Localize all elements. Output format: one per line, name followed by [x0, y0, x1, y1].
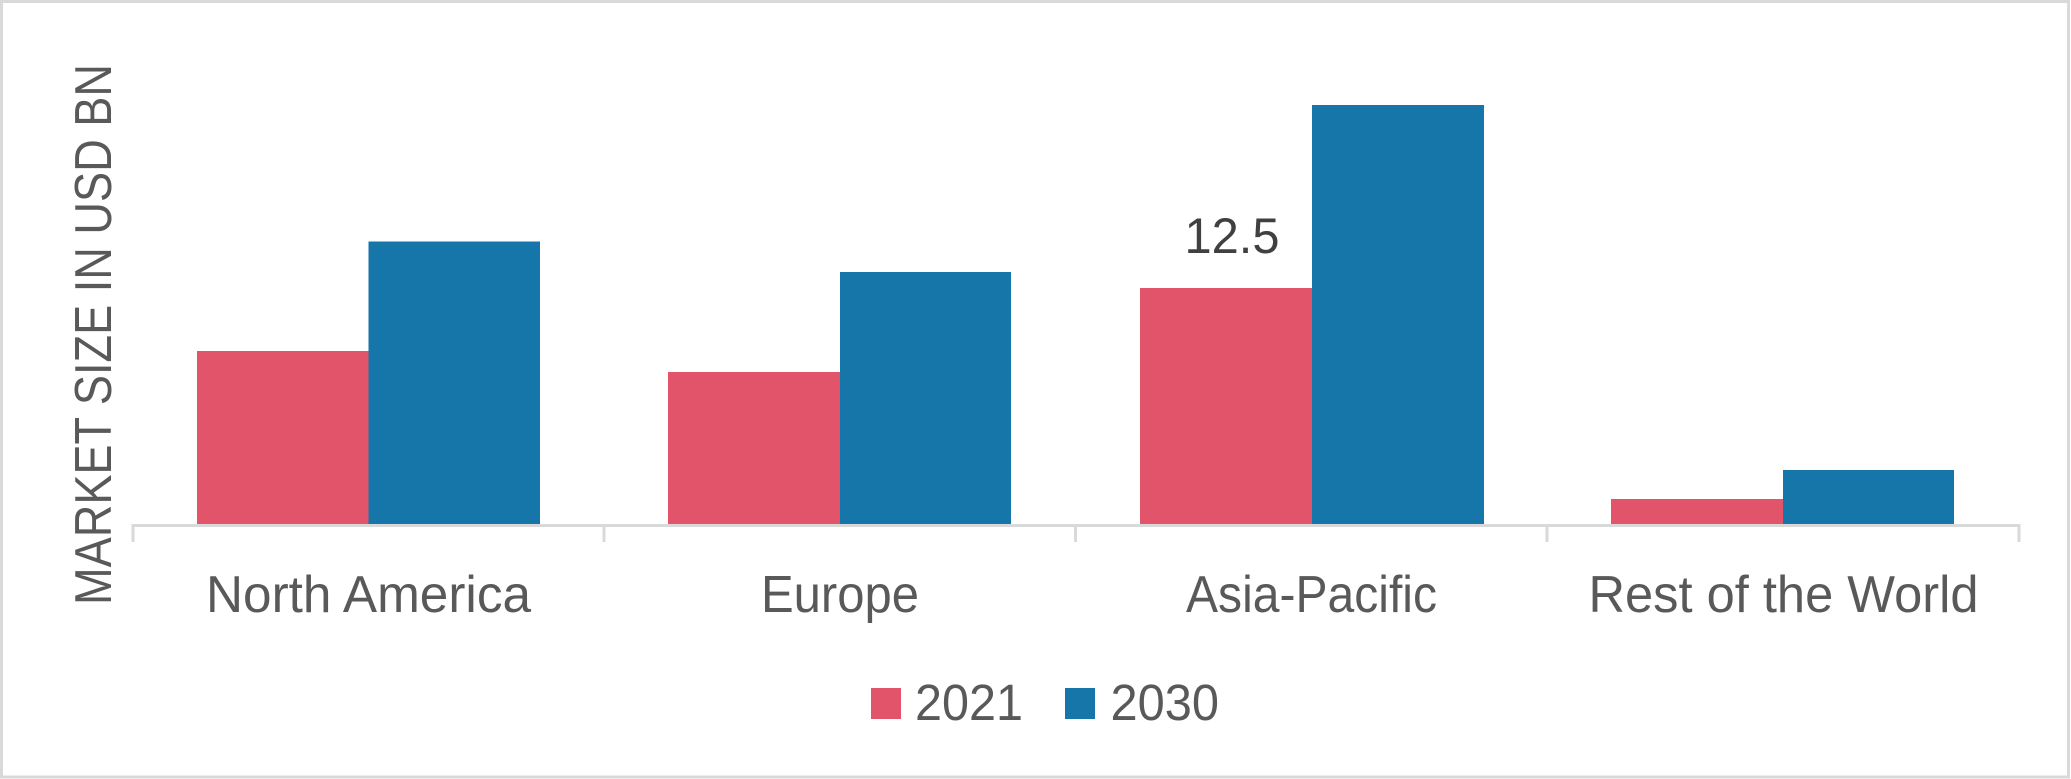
y axis title: MARKET SIZE IN USD BN — [65, 64, 123, 605]
bars: Asia-Pacific — [1140, 105, 1484, 525]
legend — [871, 674, 1219, 731]
legend: 2030 — [1110, 674, 1219, 731]
category labels — [206, 566, 1978, 624]
bars: North America — [197, 242, 540, 525]
bars: Rest of the World — [1611, 470, 1954, 525]
data label: 12.5: 12.5 — [1184, 208, 1280, 264]
bars: Europe — [668, 272, 1011, 525]
category labels: Rest of the World — [1588, 566, 1978, 624]
category labels: Europe — [761, 566, 919, 624]
legend: 2021 — [915, 674, 1023, 731]
category labels: North America — [206, 566, 531, 624]
category labels: Asia-Pacific — [1186, 566, 1437, 624]
x axis with tick marks — [133, 526, 2019, 542]
